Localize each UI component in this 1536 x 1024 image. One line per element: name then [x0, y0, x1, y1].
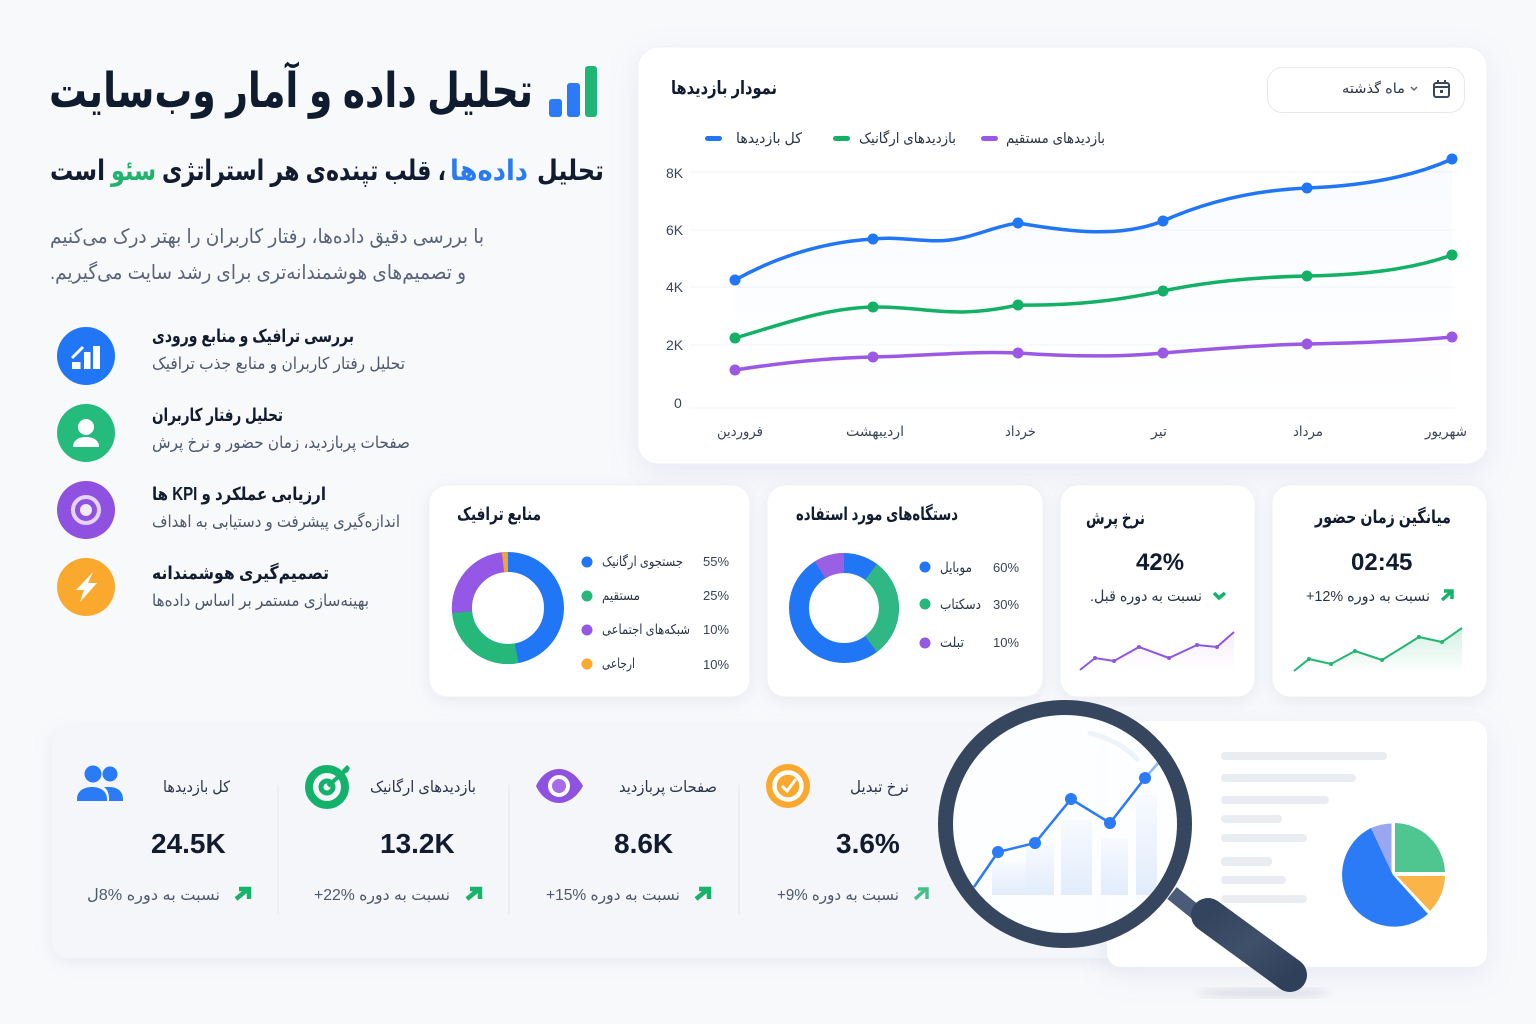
legend: traffic sources: ارجاعی — [602, 656, 635, 672]
glass shadow — [1196, 988, 1330, 998]
feature: KPI evaluation: ارزیابی عملکرد و KPI ها — [152, 484, 326, 505]
period dropdown — [1268, 68, 1464, 112]
feature: traffic review: بررسی ترافیک و منابع ورودی — [152, 326, 354, 347]
y axis labels: 2K — [666, 337, 684, 353]
icon: up arrow — [1442, 591, 1452, 600]
panel: visits line chart — [638, 47, 1487, 464]
legend: devices: تبلت — [940, 634, 964, 650]
legend: traffic sources: 55% — [703, 554, 729, 569]
legend: devices: موبایل — [940, 559, 972, 576]
feature: KPI evaluation — [57, 481, 400, 539]
period dropdown: ماه گذشته — [1342, 80, 1405, 96]
handle grip — [1208, 915, 1290, 975]
x axis labels: شهریور — [1424, 423, 1467, 440]
x axis labels: مرداد — [1293, 423, 1323, 440]
legend: devices: 30% — [993, 597, 1019, 612]
panel: average time: نسبت به دوره ⁦+12%⁩ — [1306, 588, 1430, 605]
line: total visits — [730, 154, 1458, 286]
handle neck — [1172, 893, 1198, 914]
legend: devices: 10% — [993, 635, 1019, 650]
subtitle: تحلیل — [537, 155, 604, 186]
legend — [705, 130, 1105, 147]
panel: bounce rate: نرخ پرش — [1086, 508, 1145, 529]
feature: smart decisions: بهینه‌سازی مستمر بر اساس داده‌ها — [152, 592, 369, 611]
legend: devices: 60% — [993, 560, 1019, 575]
legend: traffic sources: مستقیم — [602, 588, 640, 604]
area under total visits — [735, 159, 1452, 408]
donut: traffic sources — [462, 562, 554, 654]
feature: smart decisions: تصمیم‌گیری هوشمندانه — [152, 562, 329, 584]
KPI: organic visits — [309, 765, 480, 905]
y axis labels: 0 — [674, 395, 682, 411]
subtitle: ، قلب تپنده‌ی هر استراتژی — [162, 155, 446, 187]
KPI: total visits: 24.5K — [151, 828, 226, 859]
chart title: نمودار بازدیدها — [671, 77, 777, 99]
y axis labels: 4K — [666, 279, 684, 295]
icon: magnifying glass — [946, 708, 1330, 998]
KPI: page views: نسبت به دوره ⁦+15%⁩ — [546, 887, 680, 905]
panel: traffic sources — [429, 485, 750, 697]
intro paragraph: با بررسی دقیق داده‌ها، رفتار کاربران را بهتر درک می‌کنیم — [50, 226, 484, 248]
icon: check badge — [766, 764, 810, 808]
legend: traffic sources: شبکه‌های اجتماعی — [602, 622, 690, 637]
KPI: page views: صفحات پربازدید — [619, 779, 717, 797]
x axis labels — [717, 423, 1467, 440]
KPI: conversion rate: نسبت به دوره ⁦+9%⁩ — [777, 887, 899, 905]
icon: target — [309, 765, 350, 805]
feature: user behavior: تحلیل رفتار کاربران — [152, 405, 283, 426]
line: organic visits — [730, 250, 1458, 344]
legend: devices: دسکتاب — [940, 596, 981, 612]
KPI: total visits — [77, 766, 249, 905]
intro paragraph: و تصمیم‌های هوشمندانه‌تری برای رشد سایت می‌گیریم. — [50, 261, 466, 284]
KPI: page views: 8.6K — [614, 828, 673, 859]
pie chart — [1342, 823, 1445, 927]
legend: کل بازدیدها — [736, 131, 802, 147]
panel: bounce rate: نسبت به دوره قبل. — [1090, 588, 1202, 605]
intro paragraph — [50, 226, 484, 284]
chart inside lens — [974, 762, 1159, 895]
panel: bounce rate — [1060, 485, 1255, 697]
y axis labels: 6K — [666, 222, 684, 238]
y axis labels — [666, 165, 684, 411]
icon: check — [1214, 593, 1225, 598]
KPI: organic visits: بازدیدهای ارگانیک — [370, 778, 476, 796]
dividers — [278, 785, 739, 914]
feature: user behavior: صفحات پربازدید، زمان حضور و نرخ پرش — [152, 434, 410, 453]
y axis labels: 8K — [666, 165, 684, 181]
lens highlight — [1090, 733, 1137, 759]
legend: بازدیدهای ارگانیک — [859, 130, 956, 147]
x axis labels: خرداد — [1005, 423, 1036, 440]
feature: traffic review — [57, 326, 405, 385]
panel: devices — [767, 485, 1043, 697]
feature: KPI evaluation: اندازه‌گیری پیشرفت و دستیابی به اهداف — [152, 512, 400, 532]
legend: بازدیدهای مستقیم — [1006, 131, 1105, 147]
panel: devices: دستگاه‌های مورد استفاده — [796, 503, 958, 525]
subtitle — [50, 155, 604, 187]
feature: user behavior — [57, 404, 410, 462]
KPI: total visits: کل بازدیدها — [163, 779, 231, 796]
sparkline: bounce rate — [1080, 632, 1234, 672]
KPI: total visits: نسبت به دوره ⁦8%⁩ل — [87, 887, 220, 905]
icon: eye — [536, 769, 583, 803]
legend: traffic sources: جستجوی ارگانیک — [602, 553, 683, 570]
KPI: conversion rate: نرخ تبدیل — [850, 779, 909, 797]
subtitle: است — [50, 155, 105, 186]
KPI: page views — [536, 769, 717, 905]
panel: KPI strip — [52, 726, 1142, 958]
panel: bounce rate: 42% — [1136, 549, 1184, 576]
grid lines — [690, 172, 1455, 408]
report card illustration — [1107, 721, 1487, 967]
panel: average time: میانگین زمان حضور — [1314, 506, 1451, 528]
feature: traffic review: تحلیل رفتار کاربران و منابع جذب ترافیک — [152, 355, 405, 374]
legend: traffic sources: 25% — [703, 588, 729, 603]
KPI: organic visits: 13.2K — [380, 828, 455, 859]
subtitle: سئو — [109, 155, 156, 187]
subtitle: داده‌ها — [450, 155, 528, 186]
KPI: organic visits: نسبت به دوره ⁦+22%⁩ — [314, 887, 450, 905]
legend: traffic sources — [582, 553, 729, 672]
x axis labels: تیر — [1150, 423, 1167, 440]
donut: devices — [799, 563, 889, 653]
legend: traffic sources: 10% — [703, 622, 729, 637]
feature: smart decisions — [57, 558, 369, 616]
lens ring — [946, 708, 1184, 940]
line: direct visits — [730, 332, 1458, 376]
legend: devices — [920, 559, 1019, 650]
legend: traffic sources: 10% — [703, 657, 729, 672]
x axis labels: فروردین — [717, 423, 763, 440]
panel: average time — [1272, 485, 1487, 697]
KPI: conversion rate — [766, 764, 927, 905]
report text lines — [1221, 752, 1387, 903]
icon: users — [77, 766, 123, 801]
icon: title bar chart — [549, 66, 597, 117]
sparkline: average time — [1294, 628, 1462, 673]
x axis labels: اردیبهشت — [846, 423, 904, 440]
KPI: conversion rate: 3.6% — [836, 828, 900, 859]
panel: average time: 02:45 — [1351, 549, 1412, 576]
title: تحلیل داده و آمار وب‌سایت — [49, 61, 533, 119]
lens glass — [952, 714, 1178, 934]
panel: traffic sources: منابع ترافیک — [457, 504, 541, 525]
